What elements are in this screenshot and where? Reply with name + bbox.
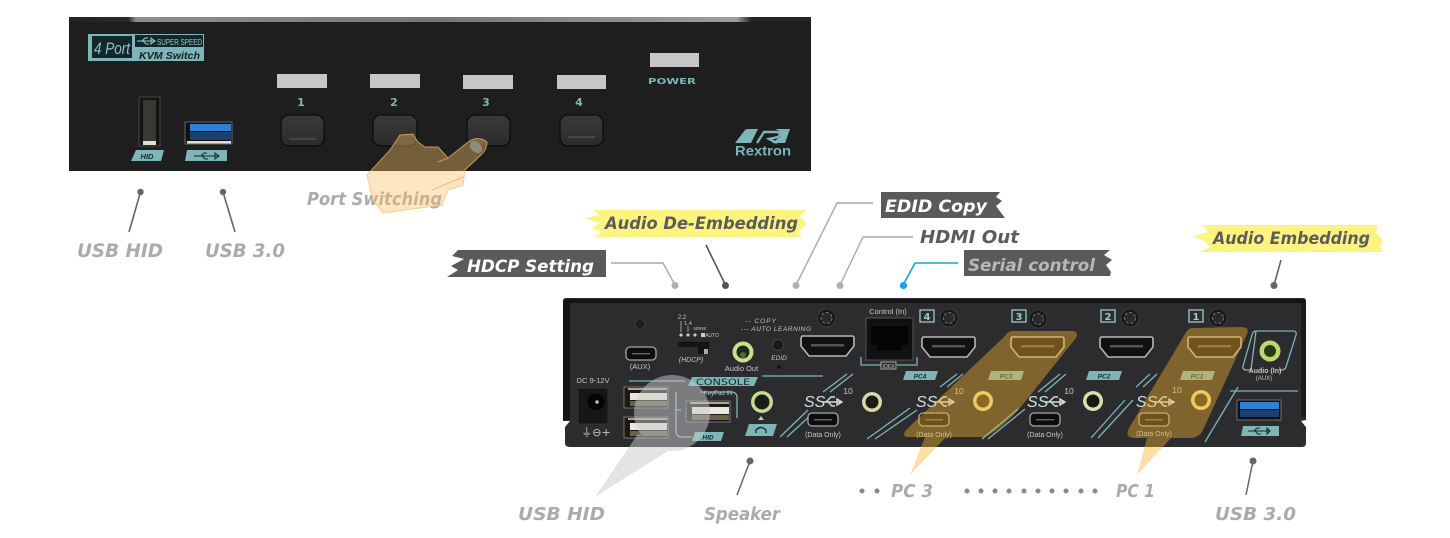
- DC power input: ⏚⊖+: [581, 426, 611, 439]
- label: PC 3: PC 3: [891, 481, 933, 502]
- audio out jack: [725, 342, 759, 373]
- rear USB 3.0 port: [1205, 387, 1298, 442]
- port 3 switch: [463, 75, 513, 146]
- front USB HID port: HID: [141, 152, 154, 161]
- port group C: USB data and audio: (Data Only): [1027, 432, 1063, 439]
- label: PC 1: PC 1: [1116, 481, 1155, 502]
- PC 2 port group: 2: [1105, 312, 1112, 323]
- port 2 switch: [370, 74, 420, 146]
- callout: Serial control: Serial control: [968, 256, 1096, 276]
- port 3 switch: 3: [482, 96, 490, 109]
- callout: front USB HID: [77, 189, 163, 262]
- PC 2 port group: PC2: [1098, 374, 1111, 380]
- HDCP selector: 2.2: [678, 315, 687, 321]
- AUX USB-C port: (AUX): [630, 362, 651, 371]
- PC 3 port group: PC3: [1000, 374, 1013, 380]
- console USB HID ports: [624, 387, 737, 442]
- callout: Serial control: [900, 250, 1112, 289]
- callout: Audio De-Embedding: [585, 210, 807, 289]
- EDID button: EDID: [771, 355, 787, 362]
- callout: EDID Copy: EDID Copy: [885, 197, 988, 217]
- power indicator: [648, 53, 699, 86]
- audio in jack: (AUX): [1256, 376, 1272, 382]
- PC 1 port group: [1180, 309, 1241, 380]
- Rextron logo: [735, 129, 791, 158]
- icon: pressing hand: [367, 134, 487, 213]
- PC 4 port group: [903, 309, 975, 380]
- callout: HDMI Out: [836, 227, 1020, 289]
- HDMI output: [801, 309, 854, 356]
- Rextron logo: Rextron: [735, 142, 791, 158]
- control serial port: [861, 307, 917, 370]
- callout: HDCP Setting: [447, 250, 678, 289]
- DC power input: DC 9-12V: [577, 376, 609, 385]
- callout: rear USB 3.0: USB 3.0: [1215, 504, 1296, 525]
- callout: front USB HID: USB HID: [77, 240, 163, 262]
- port 1 switch: 1: [297, 96, 305, 109]
- port group A: USB data and audio: [780, 374, 882, 439]
- HDCP selector: AUTO: [705, 333, 719, 339]
- EDID copy legend: --- AUTO LEARNING: [741, 326, 811, 333]
- front model badge: SUPER SPEED: [157, 38, 202, 47]
- port 4 switch: 4: [575, 96, 583, 109]
- speaker jack: [745, 391, 777, 436]
- callout: Audio Embedding: [1193, 225, 1383, 289]
- port group D: USB data and audio: [1091, 374, 1211, 438]
- port group A: USB data and audio: 10: [843, 386, 853, 396]
- AUX USB-C port: [626, 347, 656, 371]
- audio in jack: [1243, 331, 1296, 382]
- PC 1 port group: 1: [1193, 312, 1200, 323]
- console label: CONSOLE: [696, 378, 750, 388]
- audio out jack: Audio Out: [725, 364, 759, 373]
- PC 4 port group: PC4: [914, 374, 927, 380]
- panel: rear view of KVM switch: [563, 298, 1306, 447]
- HDCP selector: 1.4: [684, 321, 692, 327]
- callout: front USB 3.0: USB 3.0: [205, 240, 285, 262]
- PC 3 port group: 3: [1016, 312, 1023, 323]
- port 1 switch: [277, 74, 327, 146]
- power indicator: POWER: [648, 77, 696, 86]
- HDCP selector: NONE: [693, 326, 707, 331]
- port 4 switch: [557, 75, 606, 146]
- port 2 switch: 2: [390, 96, 398, 109]
- PC 1 port group: PC1: [1191, 374, 1204, 380]
- callout: rear USB 3.0: [1215, 458, 1296, 525]
- callout: Audio De-Embedding: Audio De-Embedding: [603, 214, 798, 234]
- port group A: USB data and audio: (Data Only): [805, 432, 841, 439]
- audio in jack: Audio (In): [1249, 368, 1281, 375]
- port group B: USB data and audio: [867, 374, 993, 439]
- HDCP selector: [678, 315, 719, 364]
- label: PC 3: [862, 481, 933, 502]
- front model badge: KVM Switch: [139, 50, 200, 62]
- front USB 3.0 port: [185, 122, 232, 161]
- EDID copy legend: [741, 318, 811, 333]
- callout: rear USB HID: USB HID: [518, 504, 605, 525]
- port group D: USB data and audio: 10: [1172, 385, 1182, 395]
- PC 3 port group: [988, 310, 1064, 380]
- console USB HID ports: KeyPad IN: [704, 391, 732, 397]
- HDCP selector: (HDCP): [679, 357, 703, 364]
- port group D: USB data and audio: (Data Only): [1136, 431, 1172, 438]
- callout: EDID Copy: [792, 192, 1005, 289]
- EDID button: [771, 340, 787, 369]
- label: Port Switching: Port Switching: [307, 189, 442, 210]
- EDID copy legend: -- COPY: [745, 318, 777, 325]
- console USB HID ports: HID: [702, 434, 714, 442]
- callout: Speaker: [704, 458, 781, 525]
- PC 4 port group: 4: [924, 312, 931, 323]
- PC 2 port group: [1086, 309, 1153, 380]
- front USB HID port: [131, 97, 164, 161]
- panel: front view of KVM switch: [69, 17, 811, 171]
- highlight: USB HID: [595, 375, 710, 497]
- console label: [629, 376, 823, 388]
- port group B: USB data and audio: (Data Only): [916, 432, 952, 439]
- callout: Speaker: Speaker: [704, 504, 781, 525]
- front model badge: [88, 34, 204, 62]
- highlight: PC 3: [904, 331, 1077, 475]
- callout: HDCP Setting: HDCP Setting: [467, 257, 594, 277]
- port group C: USB data and audio: [982, 374, 1103, 439]
- highlight: PC 1: [1127, 327, 1248, 475]
- port group B: USB data and audio: 10: [954, 386, 964, 396]
- control serial port: IOIOI: [883, 364, 894, 370]
- dotted connector between PC 3 and PC 1: [967, 488, 1095, 494]
- callout: Audio Embedding: Audio Embedding: [1211, 229, 1370, 249]
- callout: HDMI Out: HDMI Out: [920, 227, 1020, 248]
- front model badge: 4 Port: [94, 39, 131, 58]
- control serial port: Control (In): [869, 307, 907, 316]
- port group C: USB data and audio: 10: [1064, 386, 1074, 396]
- callout: front USB 3.0: [205, 189, 285, 262]
- DC power input: [577, 376, 611, 439]
